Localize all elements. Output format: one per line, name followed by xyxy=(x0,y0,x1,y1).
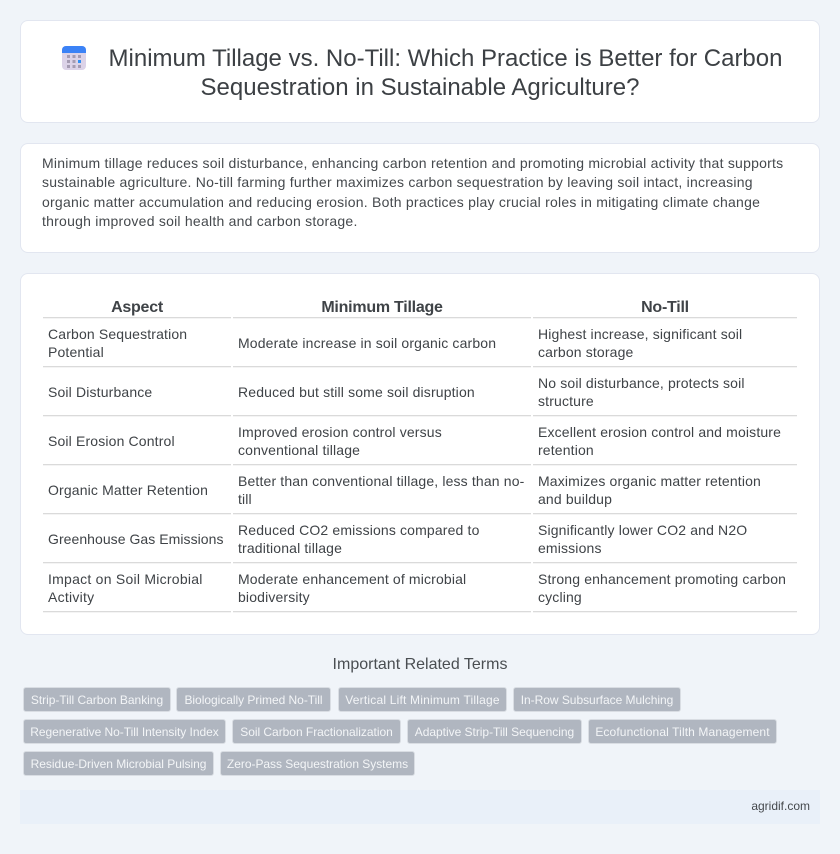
column headers xyxy=(111,299,689,316)
related term tags: In-Row Subsurface Mulching xyxy=(521,693,673,707)
related term tags: Strip-Till Carbon Banking xyxy=(31,693,163,707)
related term tags: Biologically Primed No-Till xyxy=(184,693,323,707)
table cells: Soil Erosion Control xyxy=(48,433,175,449)
footer source: agridif.com xyxy=(751,799,810,813)
table cells: Highest increase, significant soil xyxy=(538,326,742,342)
related term tags: Regenerative No-Till Intensity Index xyxy=(30,725,219,739)
related term tags: Ecofunctional Tilth Management xyxy=(595,725,770,739)
table cells: Soil Disturbance xyxy=(48,384,152,400)
table cells: Greenhouse Gas Emissions xyxy=(48,531,224,547)
table cells: biodiversity xyxy=(238,589,310,605)
table cells: emissions xyxy=(538,540,602,556)
related term tags: Vertical Lift Minimum Tillage xyxy=(345,693,500,707)
title xyxy=(109,45,782,101)
intro paragraph: sustainable agriculture. No-till farming further maximizes carbon sequestration by leaving soil intact, increasing xyxy=(42,174,753,190)
table cells: Maximizes organic matter retention xyxy=(538,473,761,489)
panel: introduction xyxy=(20,143,820,253)
comparison table xyxy=(43,299,797,612)
table cells: Better than conventional tillage, less than no- xyxy=(238,473,524,489)
related term tags: Soil Carbon Fractionalization xyxy=(240,725,393,739)
related term tags: Adaptive Strip-Till Sequencing xyxy=(415,725,574,739)
intro paragraph: Minimum tillage reduces soil disturbance, enhancing carbon retention and promoting microbial activity that supports xyxy=(42,155,783,171)
table cells: Moderate increase in soil organic carbon xyxy=(238,335,496,351)
table cells: conventional tillage xyxy=(238,442,360,458)
footer bar xyxy=(20,790,820,824)
table cells: Excellent erosion control and moisture xyxy=(538,424,781,440)
related term tags xyxy=(23,687,777,776)
table cells: Reduced but still some soil disruption xyxy=(238,384,475,400)
table cells xyxy=(48,326,786,605)
panel: comparison table xyxy=(20,273,820,635)
table cells: carbon storage xyxy=(538,344,634,360)
related term tags: Residue-Driven Microbial Pulsing xyxy=(31,757,206,771)
table cells: and buildup xyxy=(538,491,612,507)
heading: related terms: Important Related Terms xyxy=(333,656,507,673)
table cells: No soil disturbance, protects soil xyxy=(538,375,745,391)
table cells: retention xyxy=(538,442,594,458)
table cells: Strong enhancement promoting carbon xyxy=(538,571,786,587)
related term tags: Zero-Pass Sequestration Systems xyxy=(227,757,408,771)
table cells: traditional tillage xyxy=(238,540,342,556)
table cells: Impact on Soil Microbial xyxy=(48,571,203,587)
table cells: till xyxy=(238,491,252,507)
table cells: Organic Matter Retention xyxy=(48,482,208,498)
table cells: cycling xyxy=(538,589,582,605)
intro paragraph xyxy=(42,155,783,229)
title: Sequestration in Sustainable Agriculture? xyxy=(201,74,639,101)
row lines xyxy=(43,317,797,612)
panel: header xyxy=(20,20,820,123)
comparison table: Aspect xyxy=(111,299,163,316)
icon: calendar xyxy=(62,46,86,70)
intro paragraph: organic matter accumulation and reducing erosion. Both practices play crucial roles in mitigating climate change xyxy=(42,194,760,210)
table cells: Significantly lower CO2 and N2O xyxy=(538,522,747,538)
table cells: Activity xyxy=(48,589,94,605)
intro paragraph: through improved soil health and carbon storage. xyxy=(42,213,358,229)
comparison table: No-Till xyxy=(641,299,689,316)
table cells: Carbon Sequestration xyxy=(48,326,187,342)
title: Minimum Tillage vs. No-Till: Which Practice is Better for Carbon xyxy=(109,45,782,72)
comparison table: Minimum Tillage xyxy=(321,299,443,316)
table cells: Moderate enhancement of microbial xyxy=(238,571,466,587)
table cells: structure xyxy=(538,393,594,409)
table cells: Reduced CO2 emissions compared to xyxy=(238,522,480,538)
table cells: Potential xyxy=(48,344,104,360)
table cells: Improved erosion control versus xyxy=(238,424,442,440)
